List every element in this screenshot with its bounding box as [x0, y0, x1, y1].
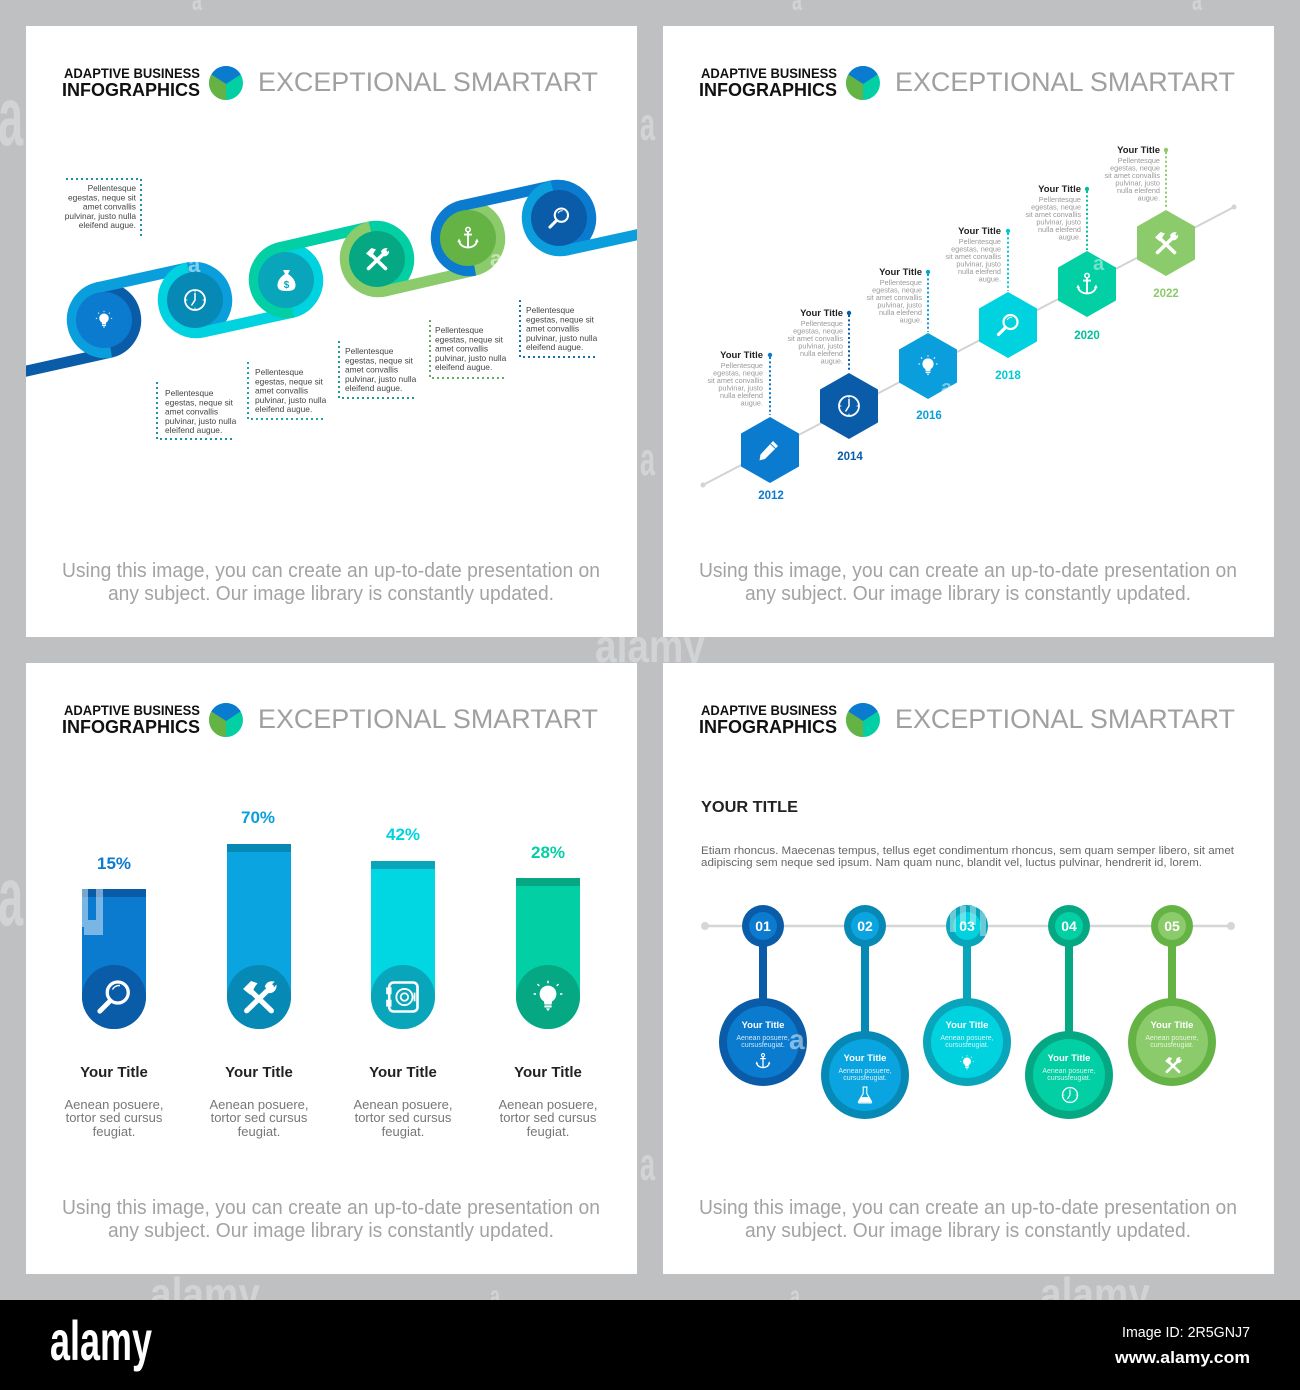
watermark fragments: timeline panel: a [1093, 253, 1105, 275]
caption: pins panel: Using this image, you can create an up-to-date presentation on [699, 1197, 1237, 1219]
caption: timeline panel: Using this image, you can create an up-to-date presentation on [699, 560, 1237, 582]
footer strip [0, 1300, 1300, 1390]
callout 3: amet convallis [255, 386, 308, 396]
milestone 2016: augue. [900, 316, 922, 324]
callout 5: eleifend augue. [435, 362, 492, 372]
panel: numbered pins [663, 663, 1274, 1274]
milestone 2016: 2016 [916, 410, 942, 422]
milestone 2018: Pellentesque [959, 237, 1001, 246]
pin 02: Your Title [844, 1053, 886, 1064]
milestone 2020: nulla eleifend [1038, 225, 1081, 234]
pin 02: cursusfeugiat. [843, 1075, 887, 1082]
node: bulb [76, 292, 132, 348]
bar: 28%: 28% [531, 843, 565, 862]
pin 05: 05 [1164, 918, 1180, 934]
milestone 2020: sit amet convallis [1025, 210, 1081, 219]
callout 3 [248, 362, 327, 419]
node: tools [349, 231, 405, 287]
node: anchor [440, 210, 496, 266]
milestone 2012: sit amet convallis [707, 376, 763, 385]
watermarks in gutters: a [790, 1281, 800, 1313]
pin 02: Aenean posuere, [838, 1068, 892, 1075]
milestone 2016: egestas, neque [872, 286, 922, 294]
milestone 2020: Your Title [1038, 184, 1081, 195]
heading: chain panel: INFOGRAPHICS [62, 79, 200, 100]
milestone 2018: nulla eleifend [958, 267, 1001, 276]
milestone 2012: 2012 [758, 490, 784, 502]
heading: bars panel [62, 703, 598, 737]
pin 05 [1128, 905, 1216, 1086]
bar: 28%: feugiat. [527, 1124, 569, 1139]
heading: pins panel: EXCEPTIONAL SMARTART [895, 704, 1235, 734]
watermark fragments: chain panel: a [188, 252, 201, 277]
milestone 2018: pulvinar, justo [956, 260, 1001, 268]
milestone 2014: egestas, neque [793, 326, 843, 336]
callout 4: pulvinar, justo nulla [345, 374, 417, 384]
bar: 15% [64, 854, 164, 1139]
milestone 2020: 2020 [1074, 330, 1100, 342]
milestone 2014: pulvinar, justo [798, 342, 843, 350]
caption: timeline panel: any subject. Our image library is constantly updated. [745, 583, 1191, 605]
caption: bars panel: Using this image, you can create an up-to-date presentation on [62, 1197, 600, 1219]
callout 5: egestas, neque sit [435, 334, 504, 344]
milestone 2020 [1025, 184, 1116, 342]
pin 05: Aenean posuere, [1145, 1035, 1199, 1042]
callout 1: Pellentesque [88, 183, 136, 193]
caption: bars panel: any subject. Our image library is constantly updated. [108, 1220, 554, 1242]
watermarks in gutters: a [640, 1140, 656, 1191]
milestone 2012: pulvinar, justo [718, 384, 763, 392]
callout 6: Pellentesque [526, 305, 575, 315]
callout 1: amet convallis [83, 202, 136, 212]
bar: 28% [498, 843, 598, 1139]
intro text: Etiam rhoncus. Maecenas tempus, tellus eget condimentum rhoncus, sem quam semper libero, sit amet [701, 845, 1234, 857]
bar: 70% [209, 808, 309, 1139]
watermarks in gutters: alamy [1040, 1268, 1150, 1320]
milestone 2012: augue. [741, 398, 763, 408]
callout 2: amet convallis [165, 407, 218, 417]
ribbon chain [20, 185, 645, 372]
pin 03: cursusfeugiat. [945, 1042, 989, 1049]
heading: timeline panel: EXCEPTIONAL SMARTART [895, 67, 1235, 97]
callout 3: pulvinar, justo nulla [255, 395, 327, 405]
heading: bars panel: ADAPTIVE BUSINESS [64, 703, 200, 718]
caption: chain panel: Using this image, you can create an up-to-date presentation on [62, 560, 600, 582]
footer strip: www.alamy.com [1114, 1348, 1250, 1367]
bar: 28%: tortor sed cursus [500, 1110, 597, 1125]
watermarks in gutters: a [640, 435, 656, 486]
callout 4: amet convallis [345, 365, 398, 375]
milestone 2012: Your Title [720, 350, 763, 361]
milestone 2014: augue. [821, 356, 843, 366]
caption: bars panel [62, 1197, 600, 1242]
watermarks in gutters: a [640, 100, 656, 151]
pin 05: cursusfeugiat. [1150, 1042, 1194, 1049]
callout 1: egestas, neque sit [68, 192, 137, 202]
callout 4 [339, 341, 417, 398]
pin 02: 02 [857, 918, 873, 934]
bar: 70%: 70% [241, 808, 275, 827]
panel: hexagon timeline [663, 26, 1274, 637]
milestone 2022: Pellentesque [1118, 156, 1160, 165]
heading: bars panel: EXCEPTIONAL SMARTART [258, 704, 598, 734]
pin 03: Aenean posuere, [940, 1035, 994, 1042]
milestone 2012: nulla eleifend [720, 391, 763, 400]
callout 3: eleifend augue. [255, 404, 312, 414]
heading: chain panel: ADAPTIVE BUSINESS [64, 66, 200, 81]
milestone 2022: sit amet convallis [1104, 171, 1160, 180]
callout 6: pulvinar, justo nulla [526, 333, 598, 343]
horizontal axis [701, 922, 1235, 930]
pin 04: 04 [1061, 918, 1077, 934]
milestone 2020: pulvinar, justo [1036, 218, 1081, 226]
milestone 2014: nulla eleifend [800, 349, 843, 358]
bar: 42%: Your Title [369, 1064, 437, 1081]
node: money bag [258, 252, 314, 308]
node: clock [167, 272, 223, 328]
milestone 2016: sit amet convallis [866, 293, 922, 302]
intro text: adipiscing sem neque sed ipsum. Nam quam nunc, blandit vel, luctus pulvinar, hendrerit id, lorem. [701, 857, 1202, 869]
milestone 2022: 2022 [1153, 288, 1179, 300]
bar: 70%: tortor sed cursus [211, 1110, 308, 1125]
bar: 70%: Your Title [225, 1064, 293, 1081]
bar: 15%: Your Title [80, 1064, 148, 1081]
heading: chain panel [62, 66, 598, 100]
bar: 42% [353, 825, 453, 1139]
milestone 2018 [945, 226, 1037, 382]
bar: 28%: Aenean posuere, [498, 1097, 598, 1112]
callout 6: eleifend augue. [526, 342, 583, 352]
bar: 15%: tortor sed cursus [66, 1110, 163, 1125]
node: money bag: $ [284, 280, 290, 291]
milestone 2018: augue. [979, 274, 1001, 284]
milestone 2014: sit amet convallis [787, 334, 843, 343]
callout 4: egestas, neque sit [345, 355, 414, 365]
bar: 42%: feugiat. [382, 1124, 424, 1139]
pin 05: Your Title [1151, 1020, 1193, 1031]
heading: timeline panel: INFOGRAPHICS [699, 79, 837, 100]
milestone 2022: nulla eleifend [1117, 186, 1160, 195]
milestone 2016: Your Title [879, 267, 922, 278]
bar: 15%: feugiat. [93, 1124, 135, 1139]
bar: 70%: feugiat. [238, 1124, 280, 1139]
pin 04: Aenean posuere, [1042, 1068, 1096, 1075]
callout 1 [65, 179, 141, 237]
pin 01 [719, 905, 807, 1086]
node: magnifier [531, 190, 587, 246]
pin 03 [923, 905, 1011, 1086]
caption: timeline panel [699, 560, 1237, 605]
callout 6: egestas, neque sit [526, 314, 595, 324]
milestone 2022: augue. [1138, 194, 1160, 202]
callout 2: Pellentesque [165, 388, 214, 398]
subheading: YOUR TITLE [701, 799, 798, 816]
milestone 2012: Pellentesque [721, 361, 763, 370]
milestone 2016: pulvinar, justo [877, 300, 922, 310]
callout 5 [430, 320, 507, 378]
bar: 15%: Aenean posuere, [64, 1097, 164, 1112]
pin 04: Your Title [1048, 1053, 1090, 1064]
milestone 2020: Pellentesque [1039, 195, 1081, 204]
milestone 2018: 2018 [995, 370, 1021, 382]
heading: bars panel: INFOGRAPHICS [62, 716, 200, 737]
pin 01: 01 [755, 918, 771, 934]
footer strip: alamy [50, 1309, 152, 1372]
milestone 2020: augue. [1059, 232, 1081, 242]
caption: pins panel [699, 1197, 1237, 1242]
watermark fragments: timeline panel: a [941, 377, 953, 399]
pin 01: Aenean posuere, [736, 1035, 790, 1042]
watermarks in gutters: alamy [150, 1268, 260, 1320]
heading: timeline panel [699, 66, 1235, 100]
pin 01: Your Title [742, 1020, 784, 1031]
callout 2: egestas, neque sit [165, 397, 234, 407]
pin 01: a [789, 1024, 805, 1055]
milestone 2016: Pellentesque [880, 278, 922, 287]
heading: timeline panel: ADAPTIVE BUSINESS [701, 66, 837, 81]
callout 5: Pellentesque [435, 325, 484, 335]
milestone 2014: Your Title [800, 308, 843, 319]
milestone 2022 [1104, 145, 1195, 300]
watermarks in gutters: alamy [595, 620, 705, 672]
callout 2 [157, 382, 237, 439]
callout 5: amet convallis [435, 344, 488, 354]
callout 1: eleifend augue. [79, 220, 136, 230]
milestone 2016 [866, 267, 957, 422]
callout 2: pulvinar, justo nulla [165, 416, 237, 426]
callout 5: pulvinar, justo nulla [435, 353, 507, 363]
milestone 2022: pulvinar, justo [1115, 178, 1160, 188]
caption: pins panel: any subject. Our image library is constantly updated. [745, 1220, 1191, 1242]
panel: percentage bars [26, 663, 637, 1274]
panel: chain process [20, 26, 645, 637]
watermark fragments: chain panel: a [490, 246, 503, 271]
timeline axis [700, 204, 1236, 488]
bar: 28%: Your Title [514, 1064, 582, 1081]
callout 6 [520, 300, 598, 357]
footer strip: Image ID: 2R5GNJ7 [1122, 1324, 1250, 1341]
heading: pins panel: INFOGRAPHICS [699, 716, 837, 737]
heading: pins panel: ADAPTIVE BUSINESS [701, 703, 837, 718]
milestone 2014: 2014 [837, 451, 863, 463]
bar: 42%: tortor sed cursus [355, 1110, 452, 1125]
caption: chain panel: any subject. Our image library is constantly updated. [108, 583, 554, 605]
callout 1: pulvinar, justo nulla [65, 211, 136, 221]
pin 01: cursusfeugiat. [741, 1042, 785, 1049]
pin 04 [1025, 905, 1113, 1119]
milestone 2018: egestas, neque [951, 244, 1001, 254]
watermark fragments: timeline panel [941, 253, 1105, 399]
milestone 2016: nulla eleifend [879, 308, 922, 317]
callout 3: Pellentesque [255, 367, 304, 377]
milestone 2014 [787, 308, 878, 463]
caption: chain panel [62, 560, 600, 605]
callout 3: egestas, neque sit [255, 376, 324, 386]
bar: 70%: Aenean posuere, [209, 1097, 309, 1112]
bar: 15%: 15% [97, 854, 131, 873]
milestone 2022: Your Title [1117, 145, 1160, 156]
milestone 2018: Your Title [958, 226, 1001, 237]
callout 4: Pellentesque [345, 346, 394, 356]
watermarks in gutters: a [490, 1281, 500, 1313]
milestone 2022: egestas, neque [1110, 164, 1160, 172]
milestone 2014: Pellentesque [801, 319, 843, 328]
callout 6: amet convallis [526, 324, 579, 334]
milestone 2012 [707, 350, 799, 502]
callout 2: eleifend augue. [165, 425, 222, 435]
bar: 42%: 42% [386, 825, 420, 844]
watermark fragments: chain panel [188, 246, 503, 277]
milestone 2020: egestas, neque [1031, 202, 1081, 212]
bar: 42%: Aenean posuere, [353, 1097, 453, 1112]
milestone 2018: sit amet convallis [945, 252, 1001, 261]
pin 02 [821, 905, 909, 1119]
heading: pins panel [699, 703, 1235, 737]
milestone 2012: egestas, neque [713, 368, 763, 378]
heading: chain panel: EXCEPTIONAL SMARTART [258, 67, 598, 97]
pin 04: cursusfeugiat. [1047, 1075, 1091, 1082]
pin 03: Your Title [946, 1020, 988, 1031]
callout 4: eleifend augue. [345, 383, 402, 393]
intro text [701, 845, 1234, 869]
pin 03: 03 [959, 918, 975, 934]
